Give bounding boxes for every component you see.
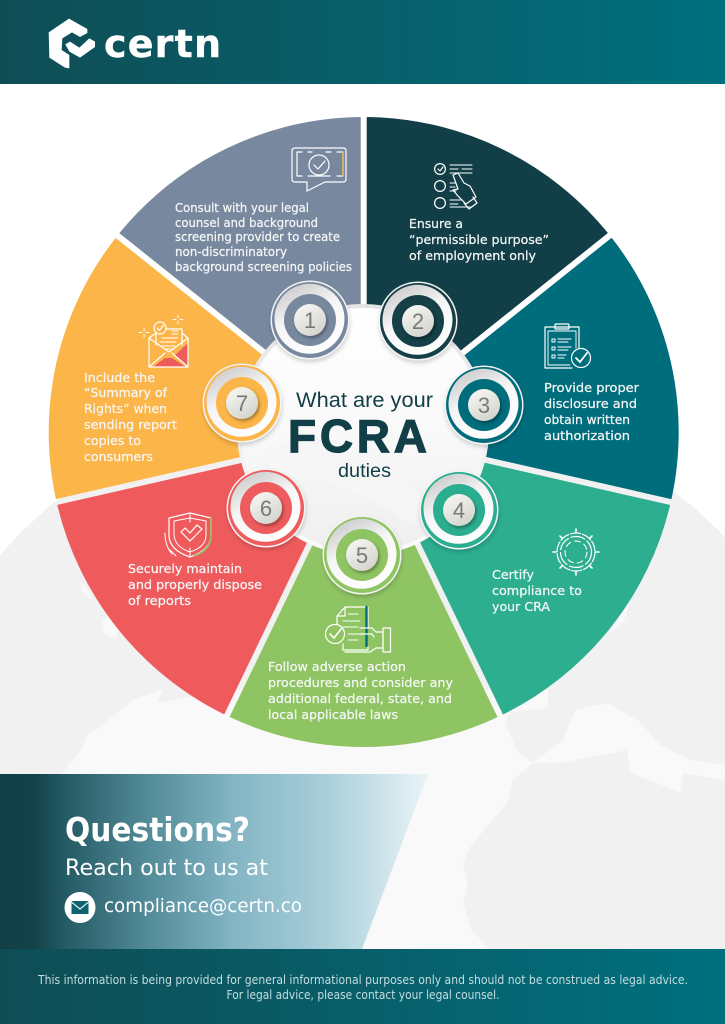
text: step 5: Follow adverse action (268, 659, 406, 674)
wedge 2 (366, 117, 608, 350)
icon: checklist with hand (435, 164, 477, 209)
text: step 4 (492, 567, 582, 614)
text: step 7 (84, 370, 177, 464)
text: step 7: “Summary of (84, 385, 168, 400)
text: step 2: of employment only (409, 248, 537, 263)
badge 7 (202, 364, 282, 442)
background: world map (0, 388, 725, 950)
wedge 7 (48, 238, 262, 500)
text: step 6: and properly dispose (128, 577, 262, 592)
text: step 3: Provide proper (544, 380, 640, 395)
text: step 5 (268, 659, 454, 722)
text: step 6 (128, 561, 262, 608)
wedge 4 (420, 462, 670, 714)
icon: clipboard (545, 324, 590, 368)
text: step 7: consumers (84, 449, 153, 464)
text: step 7: Include the (84, 370, 155, 385)
text: step 5: local applicable laws (268, 707, 398, 722)
badge 2 (378, 282, 458, 360)
panel: step 6 dispose (57, 463, 307, 714)
text: step 2: Ensure a (409, 216, 463, 231)
hub disc (239, 306, 487, 554)
badge 4 (420, 470, 498, 550)
text: step 3: authorization (544, 428, 630, 443)
callout heading: Questions? (65, 810, 250, 849)
text: step 3: disclosure and (544, 396, 637, 411)
email address: compliance@certn.co (104, 895, 302, 917)
text: step 1: background screening policies (175, 259, 352, 274)
panel: step 2 permissible purpose (366, 117, 608, 350)
text: step 1: screening provider to create (175, 229, 340, 244)
text: step 6: of reports (128, 593, 191, 608)
text: step 4: compliance to (492, 583, 582, 598)
logo mark (49, 19, 95, 68)
icon: chat check (292, 148, 346, 191)
badge 4: 4 (453, 498, 465, 523)
callout subheading: Reach out to us at (65, 856, 268, 881)
text: step 1: Consult with your legal (175, 200, 309, 215)
hub text: duties: duties (338, 461, 391, 482)
badge 7: 7 (236, 391, 248, 416)
badge 5 (322, 516, 402, 594)
footer bar (0, 949, 725, 1024)
text: step 4: Certify (492, 567, 535, 582)
icon: shield (165, 513, 211, 557)
text: step 7: Rights” when (84, 401, 167, 416)
text: step 1 (175, 200, 352, 274)
text: step 2: “permissible purpose” (409, 232, 549, 247)
badge 5: 5 (356, 543, 368, 568)
text: step 3 (544, 380, 640, 443)
text: step 2 (409, 216, 549, 263)
logo: certn (49, 19, 221, 68)
panel: questions callout (0, 774, 428, 949)
icon: seal (553, 529, 599, 575)
hub text: what are your: What are your (296, 389, 433, 412)
callout background (0, 774, 428, 949)
wedge 3 (464, 238, 679, 500)
panel: step 5 adverse action (230, 545, 498, 747)
badge 6 (226, 468, 306, 548)
panel: step 7 summary of rights (48, 238, 262, 500)
text: step 5: procedures and consider any (268, 675, 454, 690)
icon: envelope (139, 315, 188, 367)
text: step 7: sending report (84, 417, 177, 432)
badge 3 (444, 366, 524, 444)
icon: email (64, 892, 96, 923)
center hub (239, 306, 487, 554)
text: step 1: counsel and background (175, 215, 318, 230)
panel: step 3 disclosure (464, 238, 679, 500)
text: step 5: additional federal, state, and (268, 691, 452, 706)
badge 1 (270, 280, 350, 360)
text: step 1: non-discriminatory (175, 244, 288, 259)
icon: document and hand (326, 607, 390, 652)
footer disclaimer (37, 973, 688, 1002)
text: step 7: copies to (84, 433, 141, 448)
logo wordmark: certn (104, 22, 221, 66)
header bar (0, 0, 725, 84)
hub text: FCRA: FCRA (288, 410, 427, 462)
panel: step 4 certify (420, 462, 670, 714)
footer disclaimer: For legal advice, please contact your legal counsel. (226, 988, 500, 1002)
wedge 1 (119, 117, 361, 350)
panel: step 1 consult (119, 117, 361, 350)
badge 2: 2 (412, 309, 424, 334)
wedge 5 (230, 545, 498, 747)
badge 6: 6 (260, 496, 272, 521)
text: step 6: Securely maintain (128, 561, 242, 576)
text: step 4: your CRA (492, 599, 550, 614)
wedge 6 (57, 463, 307, 714)
badge 3: 3 (478, 393, 490, 418)
text: step 3: obtain written (544, 412, 630, 427)
badge 1: 1 (304, 308, 316, 333)
